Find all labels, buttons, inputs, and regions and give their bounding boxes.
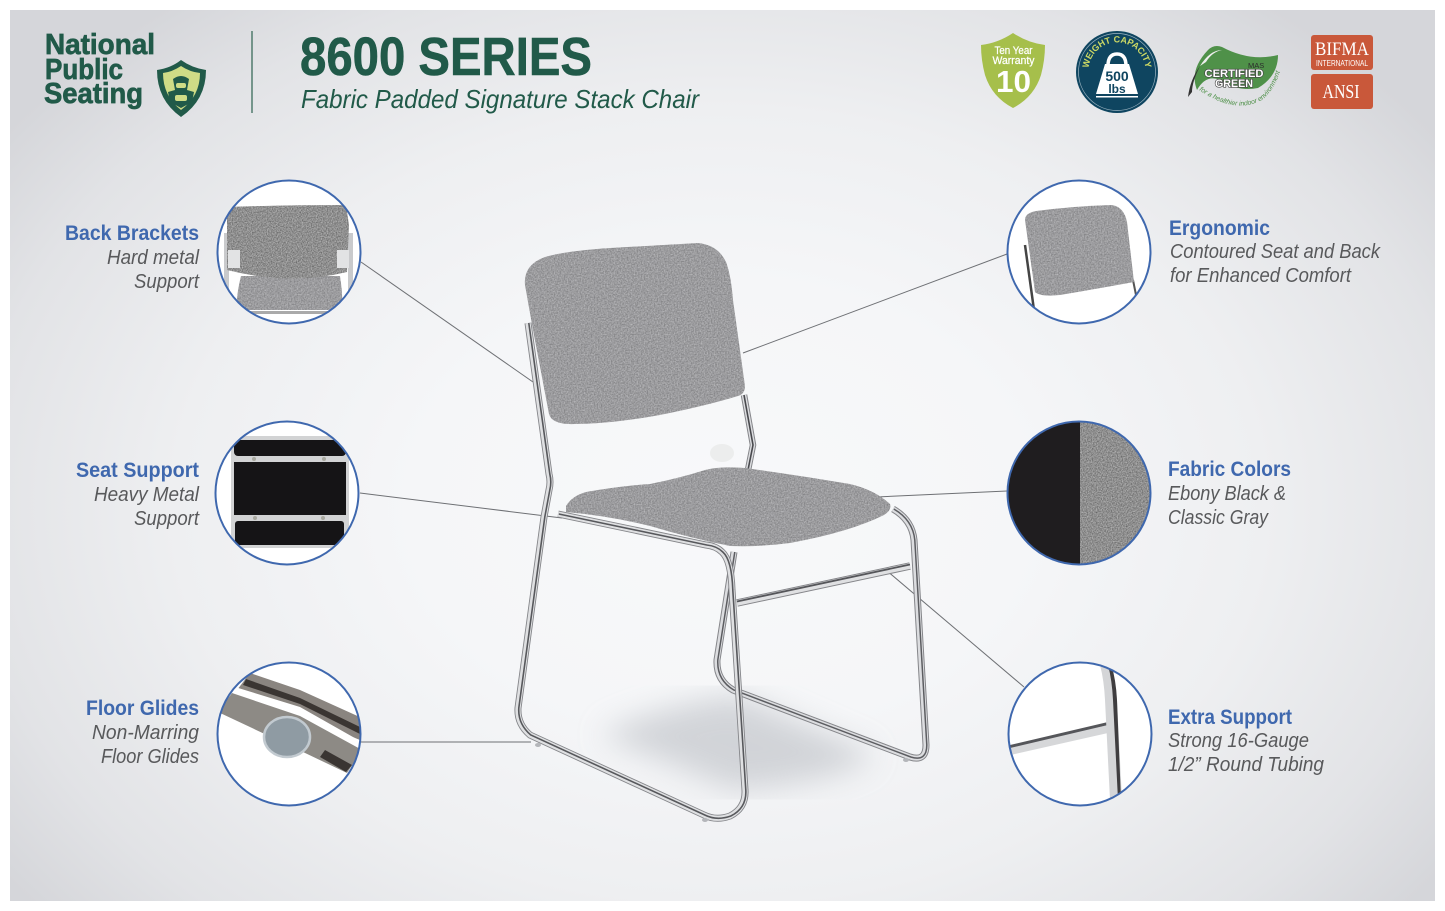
back brackets heading: Back Brackets <box>65 222 199 245</box>
header divider <box>251 31 253 113</box>
fabric colors description: Classic Gray <box>1168 507 1269 529</box>
badge: ten year warranty: 10 <box>996 64 1031 99</box>
badge: MAS certified green: GREEN <box>1215 78 1253 90</box>
seat support heading: Seat Support <box>76 459 199 482</box>
fabric colors description <box>1168 483 1286 529</box>
subtitle: Fabric Padded Signature Stack Chair <box>301 84 700 114</box>
kettlebell icon: 500 <box>1105 68 1129 84</box>
floor glides <box>535 743 909 822</box>
extra support heading: Extra Support <box>1168 706 1292 729</box>
chair photo <box>518 243 927 822</box>
fabric colors description: Ebony Black & <box>1168 483 1286 505</box>
callout: seat support <box>76 459 200 530</box>
ergonomic description <box>1170 241 1381 287</box>
logo wordmark: Seating <box>44 78 143 110</box>
callout: extra support <box>1168 706 1324 776</box>
badge: MAS certified green: MAS <box>1248 61 1264 70</box>
circle: fabric swatches <box>1007 421 1152 565</box>
extra support description: Strong 16-Gauge <box>1168 730 1309 752</box>
front frame tube <box>518 323 746 818</box>
floor glides description: Floor Glides <box>101 746 199 768</box>
logo: National Public Seating <box>44 29 206 117</box>
ergonomic heading: Ergonomic <box>1169 217 1270 240</box>
badge: BIFMA: BIFMA <box>1315 39 1369 60</box>
circle: floor glides detail <box>218 662 362 806</box>
weight capacity arc text: WEIGHT CAPACITY <box>1082 36 1152 67</box>
wall smudge <box>710 444 734 462</box>
connector lines <box>360 254 1024 742</box>
extra support description: 1/2” Round Tubing <box>1168 754 1324 776</box>
title: 8600 SERIES <box>300 27 592 87</box>
badge: ten year warranty <box>981 33 1045 108</box>
fabric colors heading: Fabric Colors <box>1168 458 1291 481</box>
ergonomic description: Contoured Seat and Back <box>1170 241 1381 263</box>
back brackets description: Support <box>134 271 200 293</box>
back cushion <box>525 243 745 424</box>
logo wordmark: National <box>45 29 155 61</box>
rear frame tubes <box>717 395 927 758</box>
kettlebell icon: lbs <box>1108 82 1126 96</box>
logo wordmark <box>44 29 155 110</box>
badge: weight capacity <box>1076 31 1158 113</box>
swatch: ebony black <box>1007 421 1080 565</box>
glide nub <box>264 717 310 757</box>
badge: MAS certified green: for a healthier indoor environment <box>1199 70 1280 106</box>
callout: back brackets <box>65 222 200 293</box>
floor glides heading: Floor Glides <box>86 697 199 720</box>
badge: BIFMA <box>1311 35 1373 70</box>
kettlebell icon <box>1096 54 1138 98</box>
seat support description: Support <box>134 508 200 530</box>
seat support description <box>94 484 200 530</box>
floor shadow <box>600 695 875 790</box>
badge: BIFMA: INTERNATIONAL <box>1316 58 1368 68</box>
callout: ergonomic <box>1169 217 1381 287</box>
badge: ANSI <box>1311 74 1373 109</box>
logo wordmark: Public <box>45 54 123 86</box>
circle: ergonomic detail <box>1008 180 1150 324</box>
floor glides description <box>92 722 199 768</box>
extra support description <box>1168 730 1324 776</box>
callout: floor glides <box>86 697 199 768</box>
badge: ten year warranty: Ten Year <box>994 45 1033 57</box>
floor glides description: Non-Marring <box>92 722 199 744</box>
badge: ANSI: ANSI <box>1322 81 1360 103</box>
logo shield <box>157 60 206 117</box>
seat cushion <box>566 467 890 546</box>
seat support description: Heavy Metal <box>94 484 200 506</box>
ergonomic description: for Enhanced Comfort <box>1170 265 1352 287</box>
badge: MAS certified green <box>1188 46 1280 106</box>
back brackets description: Hard metal <box>107 247 200 269</box>
circle: extra support detail <box>1006 662 1152 806</box>
circle: seat support detail <box>216 422 358 564</box>
circle: back brackets detail <box>218 180 360 324</box>
badge: MAS certified green: CERTIFIED <box>1204 68 1264 80</box>
back brackets description <box>107 247 200 293</box>
callout: fabric colors <box>1168 458 1291 529</box>
swatch: classic gray <box>1080 421 1152 565</box>
badge: ten year warranty: Warranty <box>992 55 1035 67</box>
